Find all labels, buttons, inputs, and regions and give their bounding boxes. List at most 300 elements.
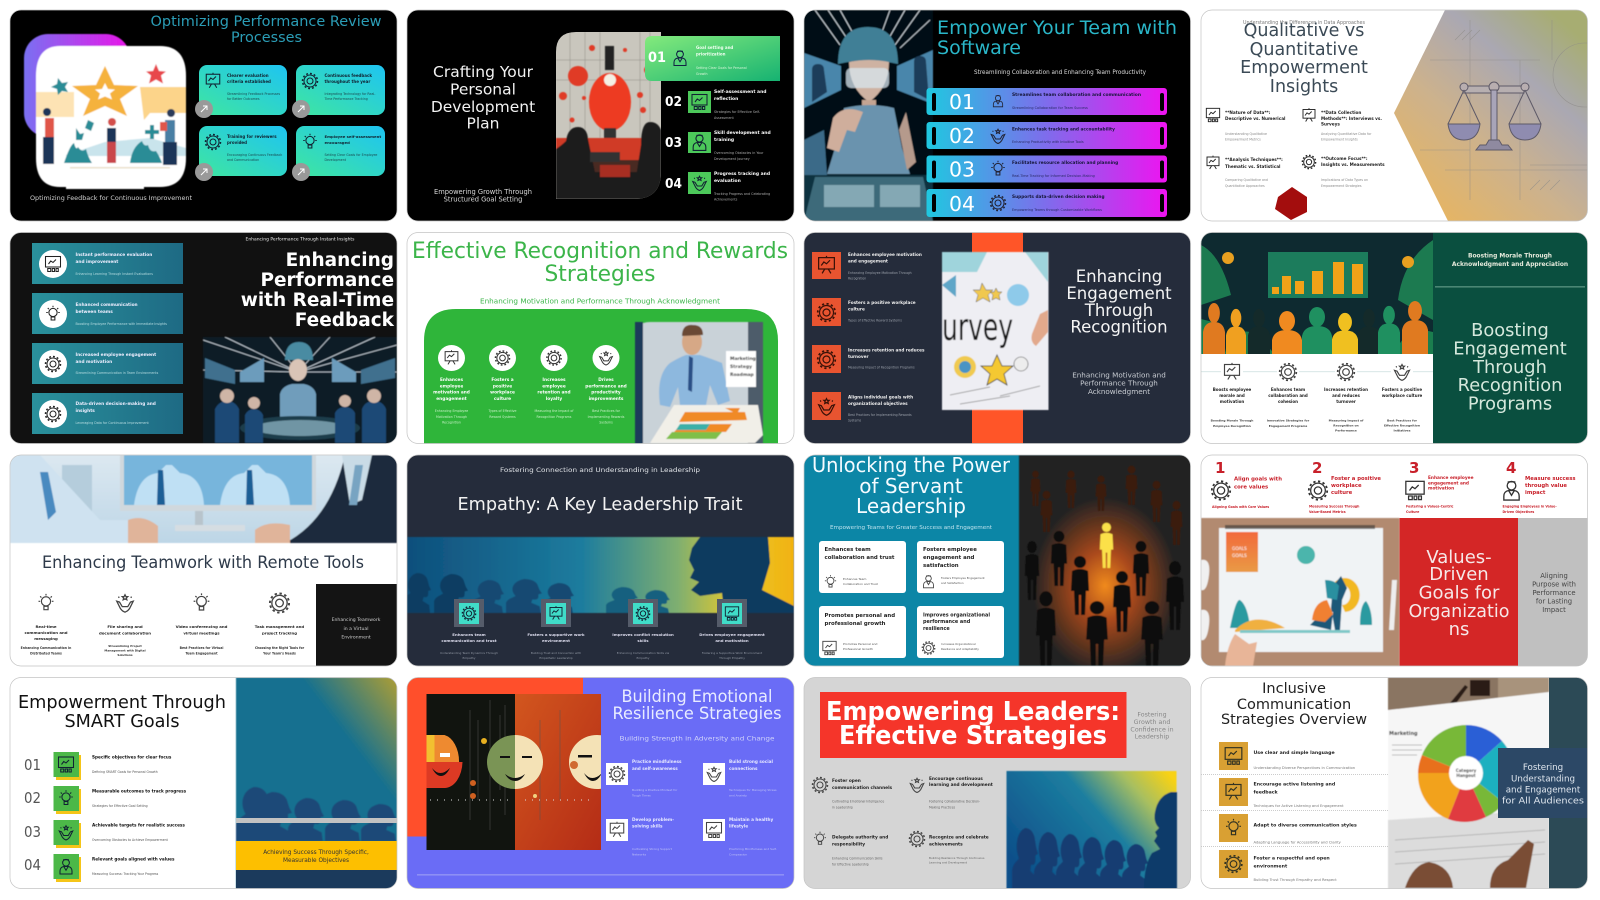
grey stripe — [236, 818, 397, 823]
heading: effective recognition: Effective Recognition and Rewards — [412, 239, 788, 264]
photo: survey on paper: urvey — [942, 306, 1013, 349]
card: clearer evaluation: for Better Outcomes — [227, 97, 260, 101]
heading: qualitative vs quantitative: Empowerment — [1240, 58, 1368, 78]
heading: real-time feedback: Feedback — [295, 310, 395, 331]
item: outcome focus: Implications of Data Types on — [1321, 178, 1368, 182]
item: mindfulness: Practice mindfulness — [632, 759, 682, 764]
yellow callout: Measurable Objectives — [283, 858, 349, 864]
item: open communication: Foster open — [832, 778, 861, 784]
heading: servant leadership: Leadership — [856, 494, 966, 518]
item: aligns goals: organizational objectives — [848, 401, 908, 406]
item: fosters positive culture: Best Practices for — [1387, 418, 1418, 422]
card: employee self-assessment — [292, 126, 385, 181]
panel: smart goals — [10, 678, 397, 889]
item: file sharing: File sharing and — [107, 624, 143, 629]
item: fosters positive culture: Types of Effective — [488, 409, 517, 413]
row: 02 self-assessment — [665, 89, 767, 120]
row 01 — [24, 752, 172, 780]
item: data collection: Methods**: Interviews vs. — [1321, 116, 1382, 121]
card: increased engagement: Streamlining Communication in Team Environments — [76, 371, 159, 375]
item: healthy lifestyle: lifestyle — [729, 824, 748, 828]
goal 2: workplace — [1331, 483, 1362, 489]
heading: crafting your plan: Development — [431, 98, 535, 116]
item: aligns goals: Aligns individual goals with — [848, 394, 913, 400]
item: nature of data — [1206, 108, 1286, 142]
row: 03 skill development: 03 — [665, 135, 682, 151]
item: analysis techniques — [1207, 156, 1283, 188]
item: team communication: communication and trust — [441, 638, 497, 643]
item: outcome focus — [1302, 155, 1385, 188]
row: diverse styles: Adapt to diverse communication styles — [1254, 822, 1357, 828]
card: employee self-assessment: encouraged — [324, 140, 350, 145]
item: supportive work environment — [527, 599, 585, 660]
caption: Structured Goal Setting — [444, 196, 522, 204]
subtitle: Enhancing Performance Through Instant Insights — [246, 236, 355, 242]
photo: goals notebook: GOALS — [1232, 546, 1247, 552]
row: 04 progress tracking: Achievements — [714, 198, 738, 202]
item: continuous learning: Making Practices — [929, 806, 955, 810]
item: fosters positive culture — [1382, 361, 1423, 432]
black callout box: Environment — [341, 634, 371, 640]
row: respectful environment: Building Trust Through Empathy and Respect — [1254, 878, 1337, 882]
item: messaging: messaging — [34, 636, 58, 641]
divider — [1435, 286, 1585, 288]
row: active listening — [1219, 778, 1344, 808]
row: 04 progress tracking — [665, 171, 770, 202]
item: messaging: Enhancing Communication in — [21, 646, 71, 650]
heading: real-time feedback: Performance — [260, 270, 394, 291]
item: video conferencing: Best Practices for Virtual — [180, 646, 223, 650]
item: enhances team collaboration: Innovative Strategies for — [1267, 418, 1310, 422]
item: boosts morale: motivation — [1220, 399, 1244, 404]
card: data-driven decision-making — [32, 393, 183, 434]
heading: enhancing engagement: Through — [1084, 301, 1153, 320]
item: video conferencing — [176, 593, 228, 656]
panel: empowering leaders — [804, 678, 1191, 900]
item: drives performance — [585, 345, 627, 424]
card: data-driven decision-making: Data-driven decision-making and — [76, 401, 156, 407]
item: nature of data: Empowerment Metrics — [1225, 138, 1261, 142]
side note: Leadership — [1135, 734, 1169, 740]
row: diverse styles: Adapting Language for Accessibility and Clarity — [1254, 840, 1342, 844]
item: enhances employee motivation: Recognition — [442, 420, 461, 424]
goal 3 — [1406, 459, 1474, 514]
item: enhances employee motivation: Motivation Through — [436, 415, 467, 419]
orange strip — [972, 232, 1023, 444]
card: data-driven decision-making: Leveraging Data for Continuous Improvement — [76, 421, 149, 425]
goal 4: impact — [1525, 490, 1546, 496]
row: clear language — [1219, 742, 1356, 770]
item: enhances team collaboration: collaboration and — [1268, 393, 1308, 398]
card: enhanced communication: Enhanced communication — [76, 302, 138, 308]
red title panel: ns — [1449, 619, 1469, 640]
row: 04 progress tracking: 04 — [665, 176, 682, 192]
item: mindfulness: Tough Times — [631, 794, 651, 798]
heading: real-time feedback: with Real-Time — [241, 290, 394, 311]
item: drives performance: Systems — [599, 420, 613, 424]
card: instant performance evaluation: Instant performance evaluation — [76, 252, 152, 258]
item: mindfulness — [606, 759, 682, 798]
row 03 — [24, 820, 185, 848]
card: training for reviewers: Training for reviewers — [227, 134, 277, 139]
green panel — [424, 309, 778, 444]
goal 1: 1 — [1215, 459, 1225, 477]
item: data collection: Empowerment Insights — [1321, 138, 1358, 142]
row 01: Defining SMART Goals for Personal Growth — [92, 770, 158, 774]
item: delegate authority: Enhancing Communication Skills — [832, 856, 883, 860]
card: personal growth: professional growth — [824, 621, 886, 627]
item: continuous learning: learning and development — [929, 782, 993, 788]
item: increases retention: Recognition on — [1333, 424, 1359, 428]
heading: enhancing engagement: Enhancing — [1076, 267, 1162, 286]
panel: qualitative vs quantitative — [1201, 10, 1600, 221]
card: 01 goal setting: 01 — [648, 50, 666, 66]
orange block — [407, 678, 583, 836]
item: fosters positive culture: Effective Recognition — [1384, 424, 1420, 428]
goal 2: Measuring Success Through — [1309, 504, 1360, 508]
photo: man at marketing strategy board — [635, 322, 763, 444]
red title panel: Organizatio — [1408, 601, 1510, 622]
item: file sharing: Management with Digital — [104, 648, 146, 652]
item: data collection: Analyzing Quantitative Data for — [1321, 132, 1372, 136]
heading: crafting your plan: Crafting Your — [433, 63, 534, 81]
panel: boosting engagement — [1201, 232, 1588, 444]
red title panel: Goals for — [1419, 582, 1500, 604]
heading: boosting engagement: Boosting — [1471, 320, 1549, 341]
bar 02: Enhances task tracking and accountability — [1012, 126, 1115, 132]
item: continuous learning: Encourage continuous — [929, 776, 983, 782]
red title panel: Values- — [1426, 547, 1492, 568]
right panel — [1433, 232, 1588, 444]
card: team collaboration: Enhances Team — [843, 577, 866, 581]
heading: crafting your plan: Plan — [467, 114, 499, 132]
item: drives performance: improvements — [589, 396, 624, 402]
card: employee self-assessment: Development — [324, 158, 347, 162]
goal 3: engagement and — [1428, 480, 1469, 486]
item: increases retention: Measuring Impact of — [1329, 418, 1364, 422]
item: data collection: Surveys — [1321, 122, 1340, 126]
row: 02 self-assessment: Assessment — [714, 116, 734, 120]
item: fosters culture: culture — [848, 306, 865, 312]
item: fosters culture: Types of Effective Reward Systems — [847, 318, 902, 322]
item: employee engagement: Fostering a Supportive Work Environment — [702, 651, 763, 655]
photo: laptop with pie chart — [1388, 678, 1549, 889]
panel: inclusive communication — [1201, 678, 1588, 889]
item: enhances motivation: Enhances employee motivation — [848, 252, 922, 257]
heading: real-time feedback: Enhancing — [286, 250, 394, 271]
heading: optimizing performance review — [151, 15, 381, 42]
subtitle: Streamlining Collaboration and Enhancing Team Productivity — [974, 70, 1147, 76]
grey side panel: Impact — [1542, 606, 1566, 614]
red title box: Empowering Leaders: — [826, 697, 1120, 727]
item: problem-solving: solving skills — [632, 824, 663, 828]
item: enhances motivation: and engagement — [848, 258, 888, 264]
bar 01: Streamlines team collaboration and communication — [1012, 92, 1141, 98]
bar 03: 03 — [949, 158, 975, 182]
card: enhanced communication: between teams — [76, 309, 113, 315]
row: 02 self-assessment: Self-assessment and — [714, 89, 767, 95]
goal 1: Align goals with — [1234, 476, 1282, 482]
bar 04 — [926, 189, 1167, 217]
item: drives performance: Drives — [598, 377, 614, 383]
item: drives performance: productivity — [591, 390, 621, 396]
goal 3: Enhance employee — [1428, 475, 1474, 481]
goal 3: Fostering a Values-Centric — [1406, 504, 1454, 508]
item: enhances employee motivation: motivation and — [433, 390, 470, 396]
item: increases retention: turnover — [1336, 399, 1356, 404]
item: increases retention: and reduces — [1332, 393, 1360, 398]
card: 01 goal setting: Setting Clear Goals for Personal — [696, 66, 747, 70]
yellow callout — [236, 841, 397, 870]
item: enhances employee motivation — [433, 345, 470, 424]
item: employee engagement: Drives employee engagement — [699, 632, 765, 637]
item: data collection — [1303, 108, 1382, 142]
item: aligns goals: Best Practices for Implementing Rewards — [848, 413, 912, 417]
row: 03 skill development: Overcoming Obstacles in Your — [714, 151, 764, 155]
item: mindfulness: and self-awareness — [632, 766, 678, 771]
item: boosts morale — [1211, 361, 1253, 428]
item: enhances employee motivation: employee — [440, 384, 463, 390]
photo: laptop with pie chart: Hangout — [1456, 773, 1476, 778]
item: messaging: Real-time — [35, 624, 57, 629]
item: increases retention: employee — [542, 384, 566, 390]
item: drives performance: Implementing Rewards — [588, 415, 625, 419]
bar 01: 01 — [949, 90, 975, 114]
item: messaging: communication and — [24, 630, 68, 635]
panel: real-time feedback — [10, 232, 397, 444]
card: employee engagement — [917, 541, 1004, 593]
goal 3: 3 — [1409, 459, 1419, 477]
bar 01 — [926, 88, 1167, 115]
photo: survey on paper — [942, 252, 1048, 410]
item: conflict resolution: skills — [637, 638, 649, 643]
row: active listening: Techniques for Active Listening and Engagement — [1252, 804, 1344, 808]
item: problem-solving: Develop problem- — [632, 817, 674, 822]
subtitle: Enhancing Motivation and — [1072, 370, 1166, 380]
item: boosts morale: morale and — [1219, 393, 1245, 398]
heading: crafting your plan: Personal — [450, 80, 516, 98]
card: employee self-assessment: Employee self-assessment — [324, 134, 381, 139]
bar 03: Facilitates resource allocation and planning — [1012, 160, 1118, 166]
item: video conferencing: Video conferencing and — [176, 624, 228, 629]
heading: smart goals: SMART Goals — [64, 711, 180, 732]
row 01: Specific objectives for clear focus — [92, 754, 172, 760]
overlay callout: and Engagement — [1506, 786, 1581, 796]
heading: servant leadership: of Servant — [859, 474, 963, 498]
item: file sharing — [99, 595, 151, 657]
panel: empower your team — [804, 10, 1191, 221]
photo: man at marketing strategy board: Strategy — [730, 364, 752, 370]
row: clear language: Understanding Diverse Perspectives in Communication — [1254, 766, 1356, 770]
item: retention — [812, 345, 925, 373]
goal 2: culture — [1331, 490, 1353, 496]
item: increases retention: retention and — [537, 390, 571, 396]
item: analysis techniques: **Analysis Techniques**: — [1225, 157, 1283, 162]
card: clearer evaluation: Streamlining Feedback Processes — [227, 92, 281, 96]
illustration: three masks — [426, 694, 625, 850]
card: instant performance evaluation: and improvement — [76, 259, 118, 265]
item: healthy lifestyle: Maintain a healthy — [729, 817, 773, 822]
item: delegate authority: for Effective Leadership — [832, 862, 869, 866]
card: clearer evaluation: criteria established — [227, 79, 271, 84]
row: 03 skill development: training — [714, 137, 734, 143]
heading: inclusive communication: Inclusive — [1262, 681, 1326, 697]
right strip — [1549, 678, 1588, 888]
photo: laptop with pie chart: Marketing — [1389, 731, 1418, 737]
item: healthy lifestyle: Practicing Mindfulness and Self- — [729, 847, 777, 851]
photo: man at marketing strategy board: Marketing — [730, 356, 756, 362]
heading: boosting engagement: Recognition — [1458, 375, 1562, 396]
goal 4: through value — [1525, 483, 1567, 489]
card: training for reviewers: provided — [227, 140, 247, 145]
goal 4: Measure success — [1525, 476, 1576, 482]
goal 2: Foster a positive — [1331, 476, 1381, 482]
item: outcome focus: Empowerment Strategies — [1321, 184, 1362, 188]
item: fosters positive culture: Reward Systems — [489, 415, 516, 419]
panel: crafting your personal development plan — [407, 10, 794, 221]
item: outcome focus: **Outcome Focus**: — [1321, 156, 1368, 161]
item: social connections: and Anxiety — [729, 794, 747, 798]
heading: optimizing performance review: Optimizing Performance Review — [150, 14, 382, 30]
caption: Optimizing Feedback for Continuous Improvement — [30, 195, 193, 202]
red title panel: Driven — [1429, 564, 1489, 585]
heading: empathy: Empathy: A Key Leadership Trait — [458, 494, 742, 515]
row 04: 04 — [24, 856, 41, 874]
item: retention: Measuring Impact of Recognition Programs — [848, 366, 915, 370]
item: open communication — [812, 778, 893, 810]
goal 2: Value-Based Metrics — [1309, 510, 1346, 514]
heading: boosting engagement: Programs — [1468, 394, 1552, 414]
card: training for reviewers: Encouraging Continuous Feedback — [227, 153, 282, 157]
item: open communication: Cultivating Emotional Intelligence — [832, 800, 884, 804]
bar 02 — [926, 122, 1167, 149]
item: increases retention: Performance — [1335, 428, 1357, 432]
item: social connections: connections — [729, 766, 758, 771]
heading: qualitative vs quantitative: Qualitative vs — [1244, 21, 1364, 41]
item: task management: Your Team's Needs — [262, 652, 296, 656]
card: 01 goal setting — [645, 36, 780, 81]
row 04: Relevant goals aligned with values — [92, 856, 175, 862]
caption: Empowering Growth Through — [434, 188, 532, 196]
card: continuous feedback: throughout the year — [324, 79, 370, 84]
item: task management: project tracking — [262, 630, 297, 636]
item: nature of data: Descriptive vs. Numerical — [1225, 116, 1286, 121]
subtitle: Fostering Connection and Understanding in Leadership — [500, 466, 700, 474]
item: increases retention: Measuring the Impact of — [535, 409, 574, 413]
photo: laptop with pie chart: Category — [1456, 768, 1477, 773]
heading: empower your team: Empower Your Team with — [937, 17, 1177, 39]
row 02: 02 — [24, 789, 41, 807]
overlay callout: Understanding — [1511, 774, 1575, 784]
card: training for reviewers — [195, 126, 287, 181]
item: video conferencing: virtual meetings — [183, 630, 220, 636]
heading: emotional resilience: Resilience Strategies — [612, 704, 782, 723]
row 03: 03 — [24, 823, 41, 841]
card: employee self-assessment: Setting Clear Goals for Employee — [324, 153, 377, 157]
item: increases retention — [1324, 361, 1368, 432]
item: fosters positive culture: positive — [493, 384, 512, 390]
item: enhances motivation — [812, 252, 922, 280]
heading: enhancing engagement: Engagement — [1066, 284, 1172, 303]
card: increased engagement: Increased employee engagement — [76, 352, 156, 358]
row: 02 self-assessment: reflection — [714, 96, 738, 102]
card: organizational resilience: Improves organizational — [923, 612, 990, 618]
heading: enhancing teamwork: Enhancing Teamwork with Remote Tools — [42, 553, 364, 573]
item: increases retention: Increases — [542, 377, 566, 383]
red hexagon — [1275, 187, 1307, 220]
panel: enhancing teamwork — [10, 455, 397, 666]
card: enhanced communication: Boosting Employee Performance with Immediate Insights — [76, 322, 167, 326]
row: respectful environment — [1219, 850, 1337, 882]
item: conflict resolution: Empathy — [637, 656, 650, 660]
item: task management: Task management and — [255, 624, 304, 629]
card: clearer evaluation — [195, 65, 287, 118]
card: 01 goal setting: Goal setting and — [696, 45, 733, 50]
item: healthy lifestyle — [703, 817, 777, 856]
illustration: leader silhouette — [1006, 771, 1177, 900]
item: nature of data: Understanding Qualitative — [1225, 132, 1267, 136]
header: Acknowledgment and Appreciation — [1452, 262, 1568, 268]
grey side panel: for Lasting — [1536, 598, 1572, 606]
card: team collaboration: Collaboration and Trust — [843, 582, 879, 586]
item: team communication: Enhances team — [452, 632, 486, 637]
row: 04 progress tracking: Tracking Progress and Celebrating — [713, 192, 770, 196]
item: enhances team collaboration: Enhances team — [1271, 387, 1305, 392]
heading: empower your team — [938, 20, 1176, 54]
illustration: team around a star — [24, 34, 186, 189]
item: file sharing: document collaboration — [99, 630, 151, 636]
row 02: Measurable outcomes to track progress — [92, 788, 187, 794]
panel: effective recognition — [407, 232, 794, 444]
item: fosters positive culture: workplace — [490, 390, 515, 396]
card: personal growth: Professional Growth — [843, 647, 873, 651]
item: employee engagement: and motivation — [715, 638, 749, 643]
item: fosters positive culture: Fosters a positive — [1382, 387, 1422, 392]
item: fosters positive culture: workplace culture — [1382, 393, 1423, 398]
card: training for reviewers: and Communication — [227, 158, 259, 162]
item: conflict resolution — [612, 599, 674, 660]
goal 2 — [1309, 459, 1381, 514]
card: 01 goal setting: Growth — [696, 72, 708, 76]
item: problem-solving: Networks — [632, 852, 647, 856]
item: aligns goals: Systems — [848, 418, 862, 422]
illustration: balance scales — [1394, 10, 1600, 221]
bar 04: Supports data-driven decision making — [1012, 194, 1105, 200]
item: recognize achievements: Recognize and celebrate — [929, 834, 989, 840]
item: enhances employee motivation: engagement — [436, 396, 467, 402]
heading: effective recognition: Strategies — [544, 262, 656, 287]
bar 03: Real-Time Tracking for Informed Decision-Making — [1012, 174, 1095, 178]
item: increases retention: Increases retention — [1324, 387, 1368, 392]
item: delegate authority: responsibility — [832, 842, 865, 848]
card: continuous feedback: Continuous feedback — [324, 73, 372, 78]
card: personal growth: Promotes Personal and — [843, 642, 878, 646]
item: fosters positive culture: Fosters a — [491, 377, 514, 383]
card: personal growth: Promotes personal and — [824, 613, 895, 619]
illustration: leader silhouette and crowd — [403, 537, 794, 621]
item: boosts morale: Boosts employee — [1213, 387, 1252, 392]
illustration: crowd on teal gradient — [236, 678, 397, 888]
card: personal growth — [819, 606, 906, 658]
bar 03 — [926, 156, 1167, 182]
bar 04: Empowering Teams through Customizable Workflows — [1012, 208, 1102, 212]
item: fosters positive culture: Initiatives — [1393, 428, 1411, 432]
subtitle: Acknowledgment — [1088, 387, 1150, 396]
card: employee engagement: engagement and — [923, 555, 975, 561]
row 02 — [24, 786, 187, 814]
item: enhances motivation: Recognition — [848, 276, 866, 280]
item: messaging — [21, 594, 71, 656]
